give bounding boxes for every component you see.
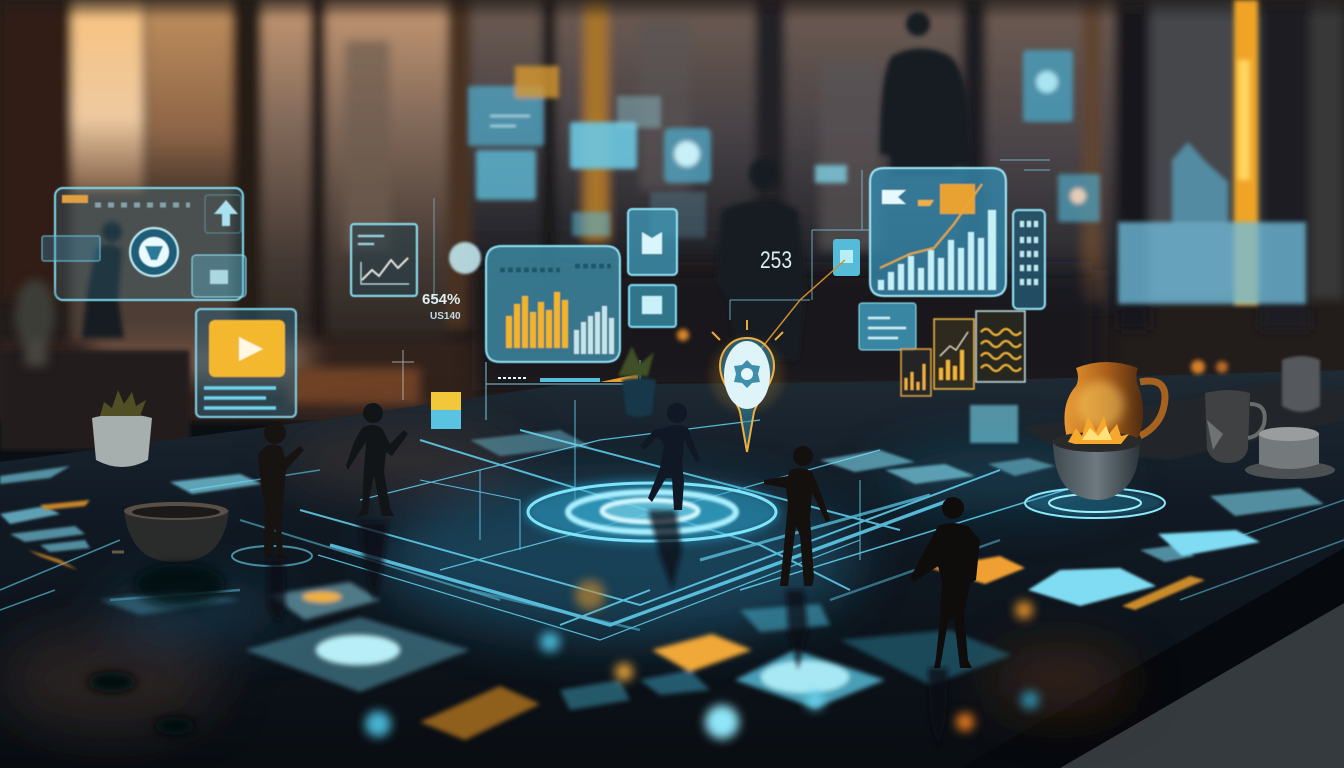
hologram: percentage labels: 654%	[422, 291, 460, 308]
hologram: phone card	[1013, 210, 1045, 309]
small figure 3	[640, 403, 700, 510]
small figure 2	[346, 403, 408, 518]
background desk items right	[677, 329, 1344, 460]
central glowing target ring	[524, 480, 780, 544]
right small target ring	[1025, 488, 1165, 518]
table surface	[0, 370, 1344, 768]
hologram: small chart cards lower right	[859, 303, 1025, 443]
centre potted plant	[618, 346, 656, 417]
table glowing tiles	[0, 430, 1324, 740]
left blurred plant and shelf	[15, 279, 55, 366]
hologram: left dashboard panel	[42, 188, 246, 300]
bowl with orange plant	[1053, 416, 1141, 500]
foreground blur shadows	[88, 672, 195, 735]
hologram: line chart card	[351, 224, 417, 296]
hologram: 253 label and connector lines	[730, 160, 1050, 350]
hologram: lower timeline strip	[392, 350, 640, 429]
mugs	[1205, 356, 1335, 479]
hologram: percentage labels	[422, 198, 481, 322]
small figure 5	[910, 497, 980, 668]
map pin with gear	[711, 320, 783, 452]
hologram: upper right tiles	[1023, 50, 1306, 304]
background: blurred office windows	[0, 0, 1344, 450]
table warm reflections	[0, 430, 1130, 730]
left small target ring	[232, 546, 312, 566]
hologram: 253 label and connector lines: 253	[760, 247, 792, 274]
hologram: central bar chart panel	[486, 246, 620, 362]
hologram: small icon cards	[628, 209, 677, 327]
small figure 4	[764, 446, 830, 586]
hologram: floating cards upper centre	[468, 66, 847, 238]
left potted plant	[92, 390, 152, 467]
dark bowl	[112, 502, 229, 607]
hologram: video player panel	[196, 309, 296, 417]
background: silhouettes of standing people	[82, 12, 972, 360]
table holographic circuit grid	[0, 400, 1344, 640]
figure reflections	[268, 510, 948, 748]
hologram: percentage labels: US140	[430, 311, 461, 322]
small figure 1	[258, 422, 304, 558]
hologram: right growth chart panel	[870, 168, 1006, 296]
orange jug	[1064, 362, 1165, 442]
floor corner	[1060, 603, 1344, 768]
